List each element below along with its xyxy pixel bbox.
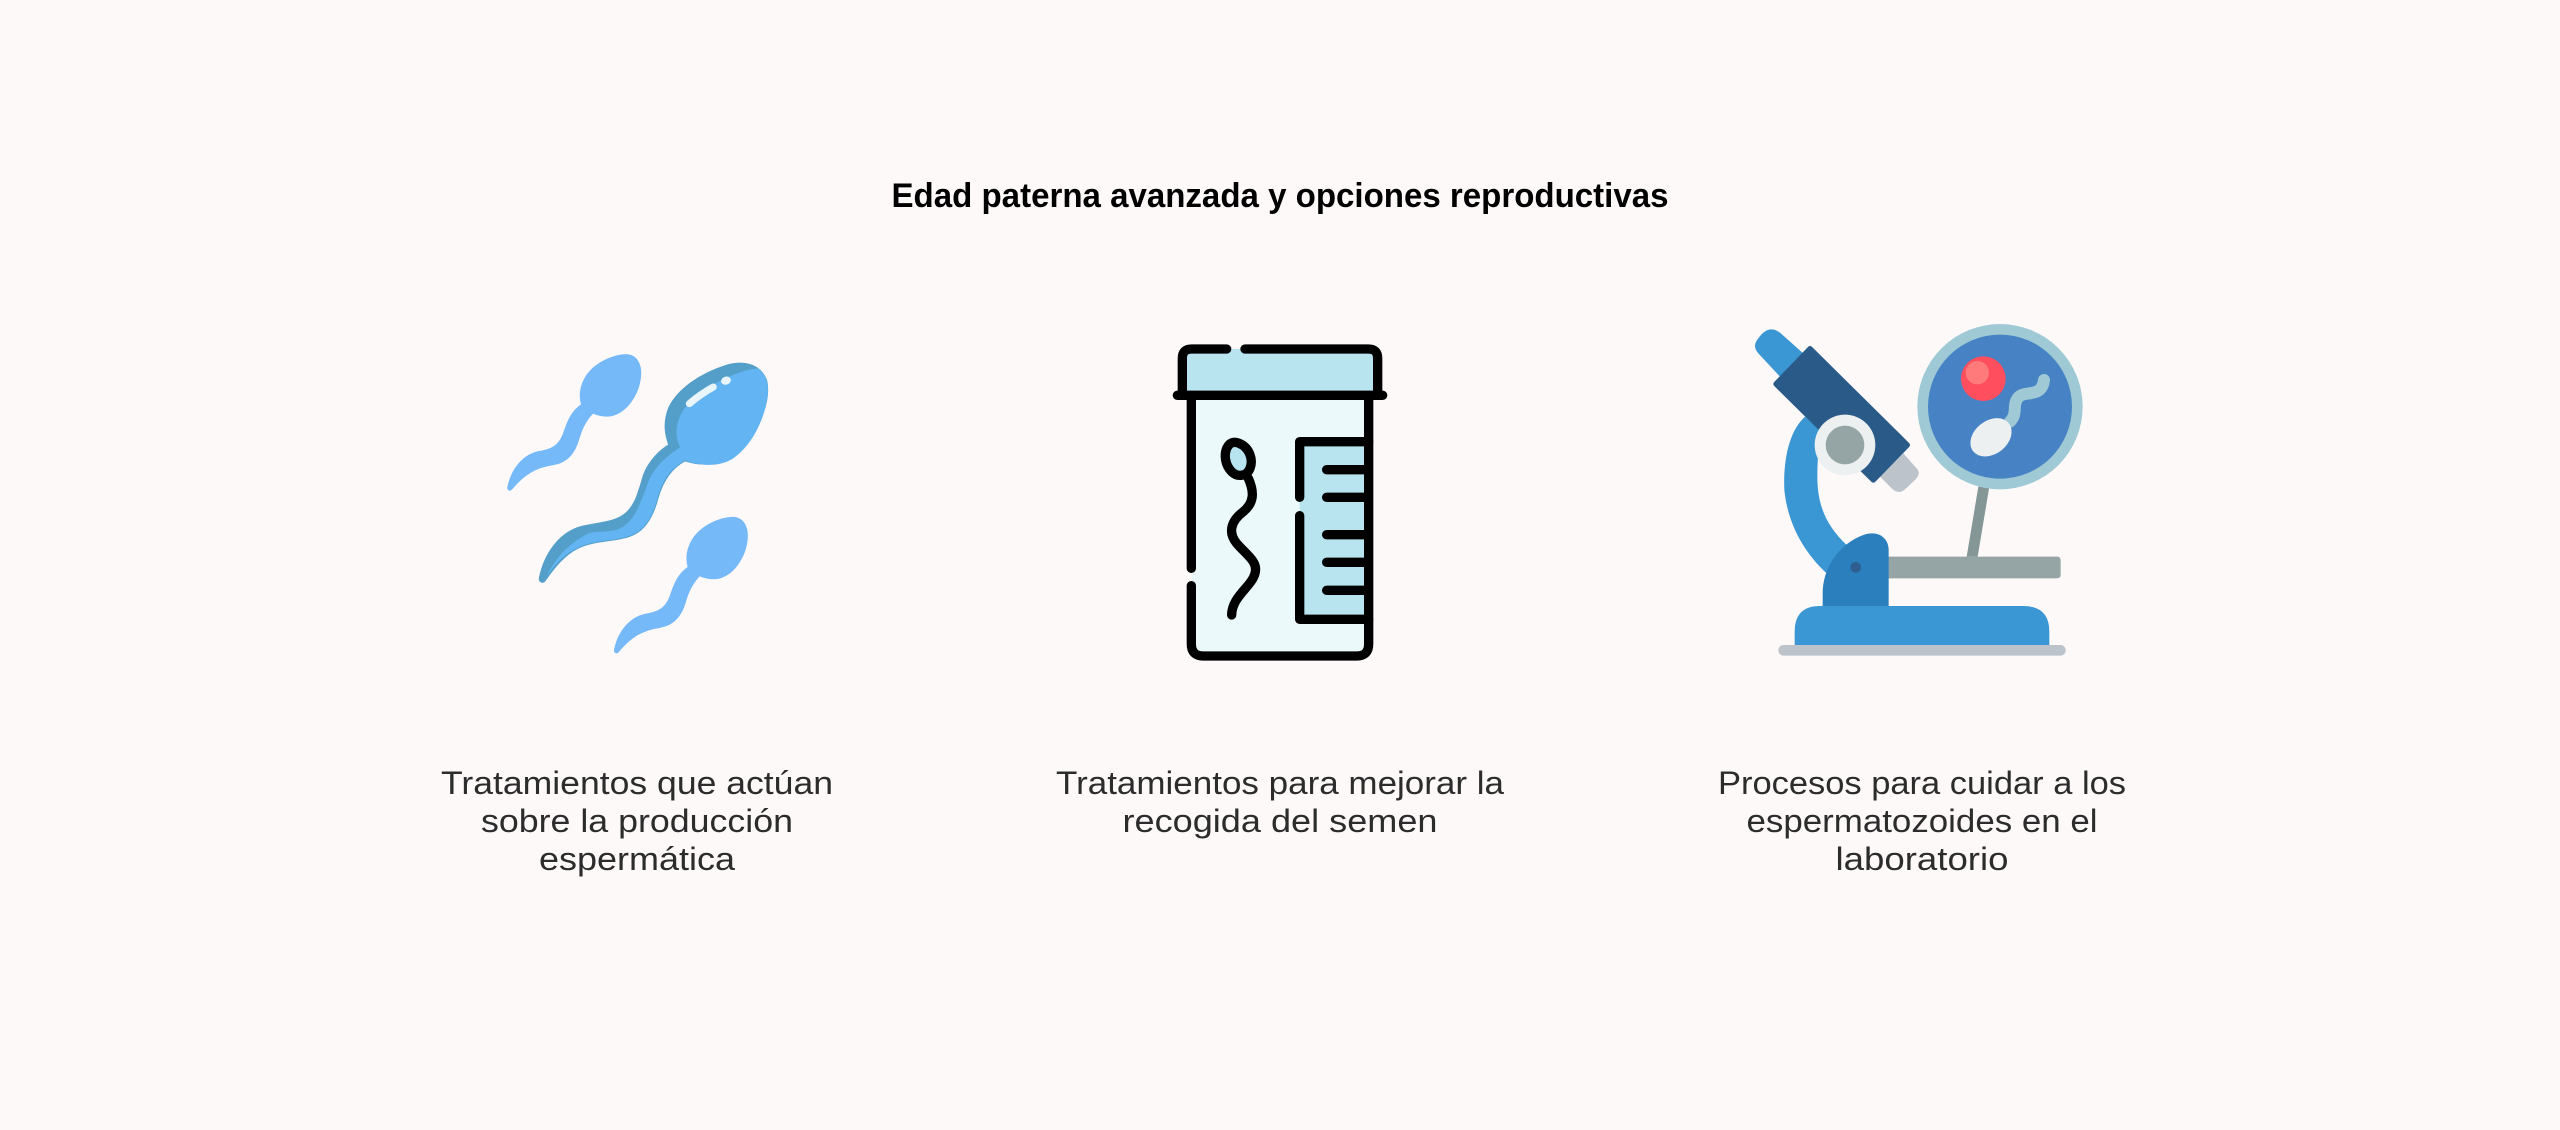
jar fills bbox=[1182, 349, 1378, 656]
magnifier stem bbox=[1967, 487, 1989, 557]
icon: sample jar bbox=[1177, 349, 1383, 656]
caption: collection bbox=[1056, 765, 1504, 839]
large sperm bbox=[540, 364, 768, 582]
caption: laboratory: Procesos para cuidar a los bbox=[1718, 765, 2126, 801]
column screw bbox=[1850, 562, 1861, 573]
tube bbox=[1776, 349, 1907, 480]
caption: collection: recogida del semen bbox=[1122, 803, 1438, 839]
caption: laboratory bbox=[1718, 765, 2126, 877]
sperm tail bbox=[1232, 478, 1256, 615]
foot bbox=[1778, 645, 2066, 656]
stage bbox=[1883, 557, 2061, 578]
lid outline bbox=[1177, 349, 1383, 395]
eyepiece bbox=[1755, 329, 1805, 377]
caption: production: sobre la producción bbox=[481, 803, 793, 839]
ruler bbox=[1300, 442, 1369, 619]
title: Edad paterna avanzada y opciones reproductivas bbox=[892, 177, 1668, 215]
caption: laboratory: espermatozoides en el bbox=[1746, 803, 2098, 839]
caption: laboratory: laboratorio bbox=[1836, 841, 2008, 877]
small sperm bottom bbox=[616, 518, 746, 652]
icon: sperm cells bbox=[509, 356, 768, 652]
body outline bbox=[1191, 395, 1369, 656]
caption: production: Tratamientos que actúan bbox=[441, 765, 833, 801]
icon: microscope bbox=[1755, 324, 2083, 656]
caption: collection: Tratamientos para mejorar la bbox=[1056, 765, 1504, 801]
caption: production: espermática bbox=[539, 841, 735, 877]
sperm drawing bbox=[1225, 442, 1251, 475]
focus knob bbox=[1815, 415, 1875, 475]
small sperm top bbox=[509, 356, 640, 489]
caption: production bbox=[441, 765, 833, 877]
column bbox=[1823, 533, 1889, 607]
arm bbox=[1784, 417, 1847, 573]
base bbox=[1795, 606, 2049, 646]
objective lens bbox=[1880, 453, 1919, 492]
magnifier view bbox=[1917, 324, 2083, 489]
